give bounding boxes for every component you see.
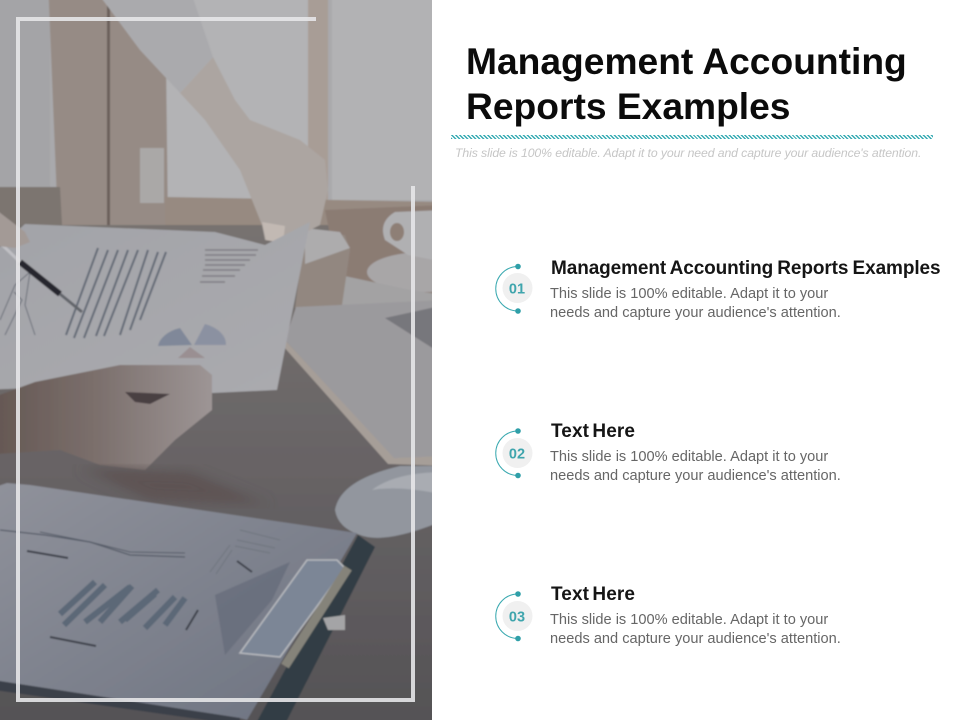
- title: Reports Examples: [466, 85, 790, 127]
- mouse: [335, 466, 445, 538]
- item 02: [495, 421, 841, 484]
- left fingers: [0, 205, 30, 248]
- item body: This slide is 100% editable. Adapt it to your: [550, 286, 828, 302]
- badge 02: 02: [509, 446, 525, 462]
- clipboard backing: [247, 535, 375, 720]
- item body: [550, 449, 841, 484]
- item body: needs and capture your audience's attention.: [550, 468, 841, 484]
- coffee cup and saucer: [340, 210, 483, 310]
- top document with charts: [0, 222, 310, 393]
- photo panel: hands reviewing financial reports on a desk: [0, 0, 432, 720]
- clipboard clip: [215, 560, 348, 666]
- desk surface: [0, 225, 445, 720]
- laptop: [283, 300, 445, 466]
- item heading: Text Here: [551, 584, 635, 605]
- item body: needs and capture your audience's attention.: [550, 305, 841, 321]
- item body: [550, 612, 841, 647]
- badge 01: [495, 264, 532, 314]
- hatched divider: [451, 135, 933, 139]
- item body: [550, 286, 841, 321]
- badge 02: [495, 428, 532, 478]
- pen: [0, 238, 82, 312]
- lower document with charts: [0, 483, 357, 720]
- item heading: Text Here: [551, 421, 635, 442]
- notebooks: [295, 232, 350, 308]
- item 03: [495, 584, 841, 647]
- item 01: [495, 258, 940, 321]
- item body: needs and capture your audience's attention.: [550, 631, 841, 647]
- white photo frame: [18, 19, 413, 700]
- badge 03: 03: [509, 610, 525, 626]
- item body: This slide is 100% editable. Adapt it to your: [550, 612, 828, 628]
- lower hand: [0, 365, 212, 470]
- badge 03: [495, 591, 532, 642]
- wooden window frame: [0, 0, 445, 245]
- desk reflection: [80, 468, 270, 505]
- item body: This slide is 100% editable. Adapt it to your: [550, 449, 828, 465]
- badge 01: 01: [509, 282, 525, 298]
- upper arm and hand: [88, 0, 328, 243]
- subtitle: This slide is 100% editable. Adapt it to your need and capture your audience's attention.: [455, 146, 921, 160]
- title: Management Accounting: [466, 40, 907, 82]
- item heading: Management Accounting Reports Examples: [551, 258, 940, 279]
- title: [466, 40, 907, 127]
